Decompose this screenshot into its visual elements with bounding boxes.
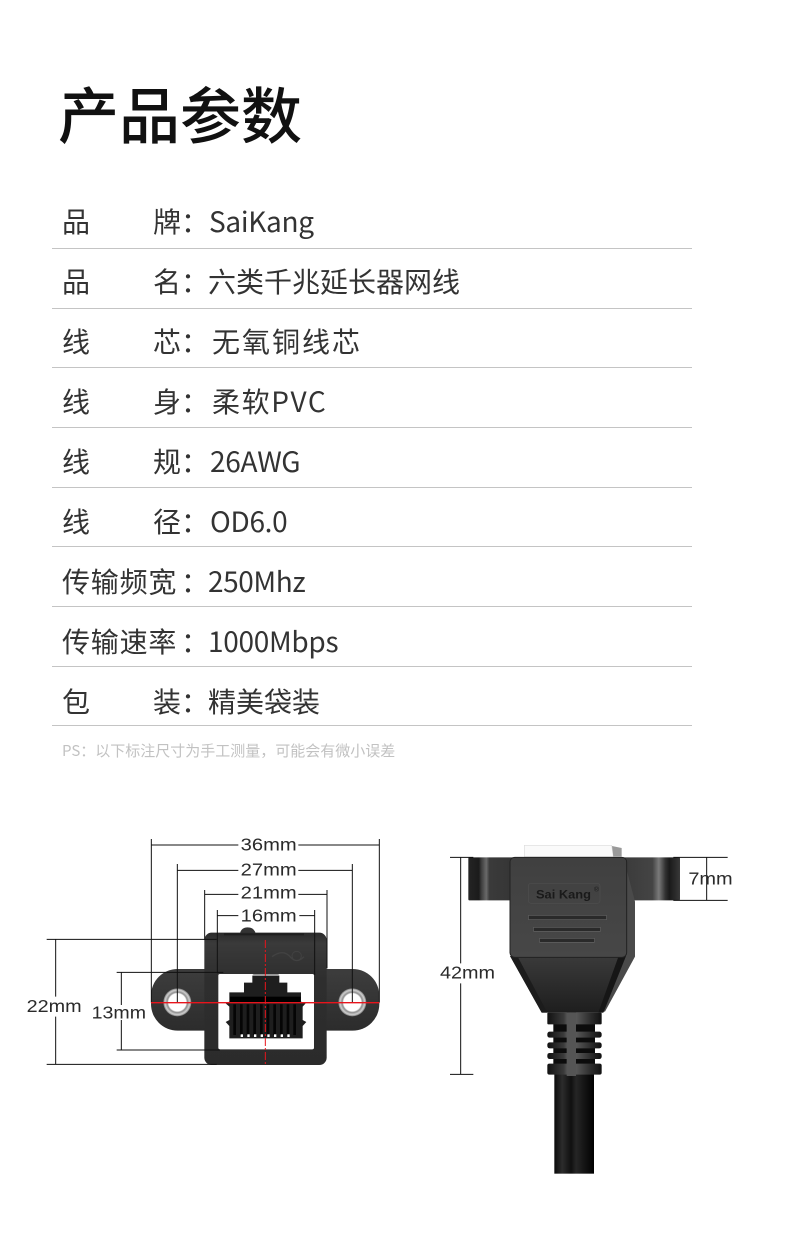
spec table: 牌	[153, 201, 181, 241]
shell side	[612, 846, 622, 857]
dimension lines	[47, 839, 379, 1064]
spec table: ：	[181, 621, 209, 661]
housing	[510, 857, 635, 1013]
spec table: ：	[181, 261, 209, 301]
spec table: ：	[181, 381, 209, 421]
spec table: 装	[153, 681, 181, 721]
dimension labels: 27mm	[241, 860, 297, 880]
spec row: packaging	[62, 681, 320, 721]
spec table: 传输速率	[62, 621, 177, 661]
spec table: 规	[153, 441, 181, 481]
spec row: jacket	[62, 381, 327, 421]
dimension labels: 7mm	[688, 869, 733, 889]
housing: ®	[594, 885, 599, 893]
spec table: ：	[181, 441, 209, 481]
spec table: 六类千兆延长器网线	[208, 261, 460, 301]
spec row: product name	[62, 261, 460, 301]
spec table: 芯	[153, 321, 181, 361]
housing: Sai Kang	[536, 888, 591, 902]
spec table: 250Mhz	[208, 561, 305, 601]
mounting holes	[163, 988, 366, 1016]
strain relief	[547, 1013, 602, 1076]
spec table: 品	[62, 261, 90, 301]
spec table: 26AWG	[210, 441, 300, 481]
mounting flange	[468, 857, 680, 900]
red centre lines	[151, 940, 379, 1065]
spec table: 精美袋装	[208, 681, 320, 721]
dimension labels: 16mm	[241, 905, 297, 925]
spec table: ：	[181, 321, 209, 361]
top metal shell	[524, 845, 613, 857]
dimension labels	[27, 835, 297, 1022]
dimension labels: 13mm	[92, 1002, 146, 1022]
spec table: 身	[153, 381, 181, 421]
spec table: 线	[62, 321, 90, 361]
spec table: ：	[181, 681, 209, 721]
RJ45 port	[218, 974, 314, 1049]
spec table: 线	[62, 381, 90, 421]
spec table: 品	[62, 201, 90, 241]
spec table: 线	[62, 501, 90, 541]
spec row: brand	[62, 201, 314, 241]
spec table: 传输频宽	[62, 561, 177, 601]
spec row: conductor	[62, 321, 362, 361]
spec table: 径	[153, 501, 181, 541]
dimension labels: 42mm	[440, 962, 495, 982]
spec table: 1000Mbps	[208, 621, 338, 661]
connector front: body and flange	[151, 927, 379, 1065]
spec table: ：	[181, 561, 209, 601]
spec row: gauge	[62, 441, 300, 481]
spec table: SaiKang	[209, 201, 314, 241]
spec table: OD6.0	[210, 501, 287, 541]
spec table: 无氧铜线芯	[212, 321, 362, 361]
spec table: 柔软PVC	[212, 381, 327, 421]
spec table: ：	[181, 201, 209, 241]
dimension labels: 36mm	[241, 835, 297, 855]
side view diagram	[440, 845, 733, 1174]
title: 产品参数	[58, 67, 302, 156]
spec table: 线	[62, 441, 90, 481]
spec row: bandwidth	[62, 561, 305, 601]
dimension labels: 21mm	[241, 883, 297, 903]
spec table: 名	[153, 261, 181, 301]
dimension labels	[440, 869, 733, 982]
spec table: ：	[181, 501, 209, 541]
spec table: 包	[62, 681, 90, 721]
front view diagram	[27, 835, 379, 1065]
spec row: diameter	[62, 501, 287, 541]
spec row: transfer rate	[62, 621, 338, 661]
spec table	[52, 201, 692, 726]
dimension lines	[450, 857, 728, 1074]
footnote: PS：以下标注尺寸为手工测量，可能会有微小误差	[62, 740, 395, 761]
dimension labels: 22mm	[27, 996, 82, 1016]
cable	[554, 1073, 594, 1174]
